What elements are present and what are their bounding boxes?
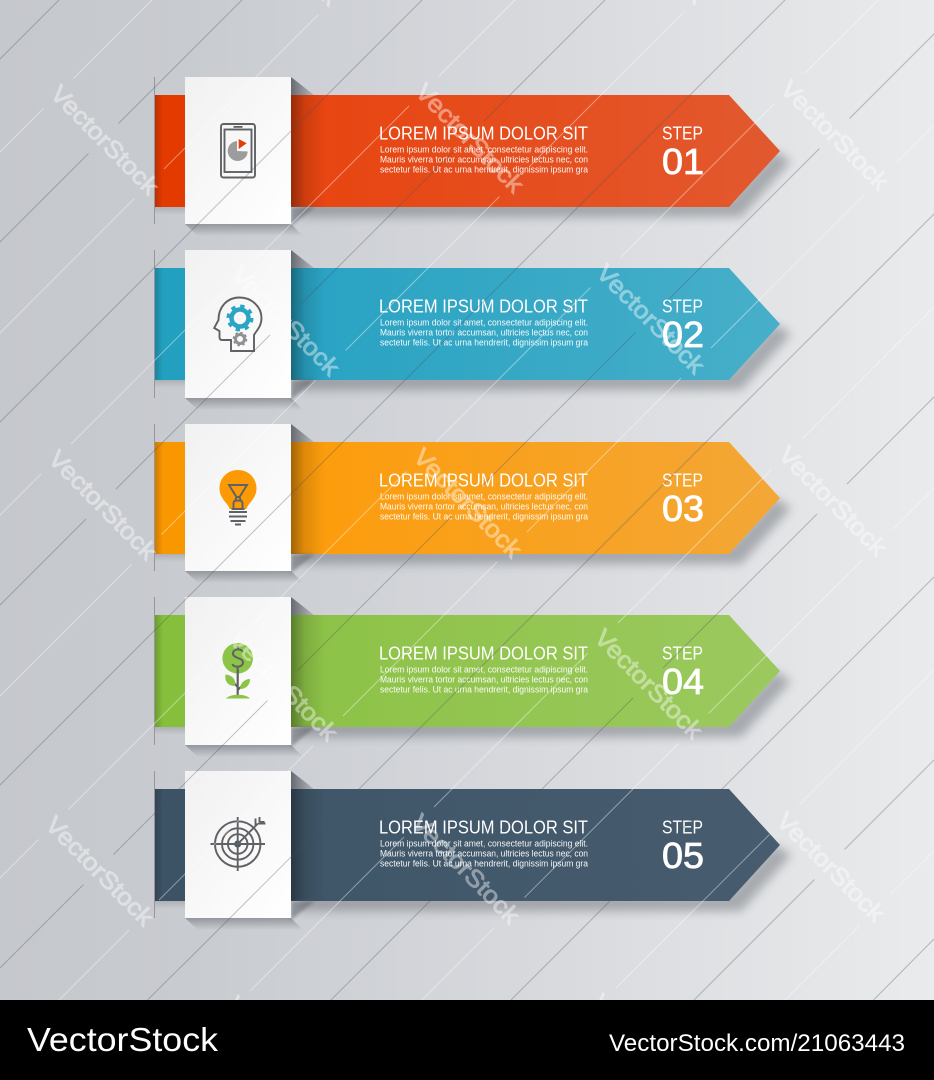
arrow shadow <box>300 671 791 737</box>
step label: STEP <box>662 817 703 837</box>
body text: Mauris viverra tortor accumsan, ultricies lectus nec, con <box>380 849 588 859</box>
fold edge <box>154 597 155 745</box>
watermark text: VectorStock <box>775 75 894 196</box>
step number: 05 <box>662 835 704 876</box>
bar left stub <box>155 268 187 380</box>
step label: STEP <box>662 123 703 143</box>
watermark text: VectorStock <box>589 624 708 745</box>
body text: Lorem ipsum dolor sit amet, consectetur adipiscing elit. <box>380 492 588 502</box>
body text: Lorem ipsum dolor sit amet, consectetur adipiscing elit. <box>380 318 588 328</box>
body text: sectetur felis. Ut ac urna hendrerit, dignissim ipsum gra <box>380 338 588 348</box>
watermark text: VectorStock <box>410 78 529 199</box>
bar left stub <box>155 95 187 207</box>
heading: LOREM IPSUM DOLOR SIT <box>379 296 588 316</box>
step 2 row <box>154 250 791 410</box>
body text: Mauris viverra tortor accumsan, ultricies lectus nec, con <box>380 675 588 685</box>
step label: STEP <box>662 296 703 316</box>
heading: LOREM IPSUM DOLOR SIT <box>379 123 588 143</box>
watermark text: V <box>222 991 252 1022</box>
body text <box>380 145 588 175</box>
fold edge <box>154 424 155 571</box>
arrow bar <box>289 268 780 380</box>
arrow shadow <box>300 151 791 217</box>
body text <box>380 665 588 695</box>
watermark text: V <box>587 989 617 1020</box>
arrow shadow <box>300 324 791 390</box>
step label: STEP <box>662 643 703 663</box>
body text <box>380 839 588 869</box>
body text <box>380 492 588 522</box>
icon: head with gears <box>214 298 262 351</box>
body text: Lorem ipsum dolor sit amet, consectetur adipiscing elit. <box>380 665 588 675</box>
fold edge <box>154 250 155 398</box>
body text: sectetur felis. Ut ac urna hendrerit, dignissim ipsum gra <box>380 165 588 175</box>
card shadow <box>291 77 314 95</box>
heading: LOREM IPSUM DOLOR SIT <box>379 643 588 663</box>
step 4 row <box>154 597 791 757</box>
step number: 04 <box>662 661 704 702</box>
icon card <box>185 424 291 571</box>
arrow bar <box>289 615 780 727</box>
body text <box>380 318 588 348</box>
card shadow <box>291 250 314 268</box>
arrow bar <box>289 789 780 901</box>
body text: Lorem ipsum dolor sit amet, consectetur adipiscing elit. <box>380 839 588 849</box>
step label: STEP <box>662 470 703 490</box>
arrow shadow <box>300 845 791 911</box>
step number: 02 <box>662 314 704 355</box>
watermark text: VectorStock <box>591 259 710 380</box>
step 3 row <box>154 424 791 583</box>
watermark text: VectorStock <box>40 811 159 932</box>
body text: sectetur felis. Ut ac urna hendrerit, dignissim ipsum gra <box>380 512 588 522</box>
body text: Mauris viverra tortor accumsan, ultricies lectus nec, con <box>380 502 588 512</box>
arrow bar <box>289 95 780 207</box>
icon card <box>185 250 291 398</box>
watermark text: VectorStock <box>408 443 527 564</box>
body text: sectetur felis. Ut ac urna hendrerit, dignissim ipsum gra <box>380 859 588 869</box>
icon: target with arrow <box>210 817 266 871</box>
step number: 03 <box>662 488 704 529</box>
body text: Lorem ipsum dolor sit amet, consectetur adipiscing elit. <box>380 145 588 155</box>
footer bar <box>0 1000 934 1080</box>
step number: 01 <box>662 141 704 182</box>
heading: LOREM IPSUM DOLOR SIT <box>379 817 588 837</box>
fold edge <box>154 77 155 224</box>
watermark text: VectorStock <box>773 441 892 562</box>
watermark text: VectorStock <box>224 626 343 747</box>
footer id: VectorStock.com/21063443 <box>609 1030 905 1057</box>
body text: sectetur felis. Ut ac urna hendrerit, dignissim ipsum gra <box>380 685 588 695</box>
arrow shadow <box>300 498 791 564</box>
icon card <box>185 597 291 745</box>
icon: money plant <box>222 643 253 698</box>
watermark text: VectorStock <box>771 807 890 928</box>
watermark text: VectorStock <box>226 261 345 382</box>
watermark text: VectorStock <box>406 809 525 930</box>
icon: tablet with pie chart <box>221 124 255 178</box>
heading: LOREM IPSUM DOLOR SIT <box>379 470 588 490</box>
icon card <box>185 771 291 918</box>
arrow bar <box>289 442 780 554</box>
card shadow <box>291 424 314 442</box>
icon card <box>185 77 291 224</box>
fold edge <box>154 771 155 918</box>
card shadow <box>291 597 314 615</box>
step 5 row <box>154 771 791 930</box>
footer logo: VectorStock <box>27 1021 219 1058</box>
watermark text: VectorStock <box>45 80 164 201</box>
body text: Mauris viverra tortor accumsan, ultricies lectus nec, con <box>380 155 588 165</box>
icon: light bulb <box>220 470 256 524</box>
step 1 row <box>154 77 791 236</box>
body text: Mauris viverra tortor accumsan, ultricies lectus nec, con <box>380 328 588 338</box>
bar left stub <box>155 442 187 554</box>
bar left stub <box>155 615 187 727</box>
card shadow <box>291 771 314 789</box>
watermark text: VectorStock <box>43 445 162 566</box>
bar left stub <box>155 789 187 901</box>
